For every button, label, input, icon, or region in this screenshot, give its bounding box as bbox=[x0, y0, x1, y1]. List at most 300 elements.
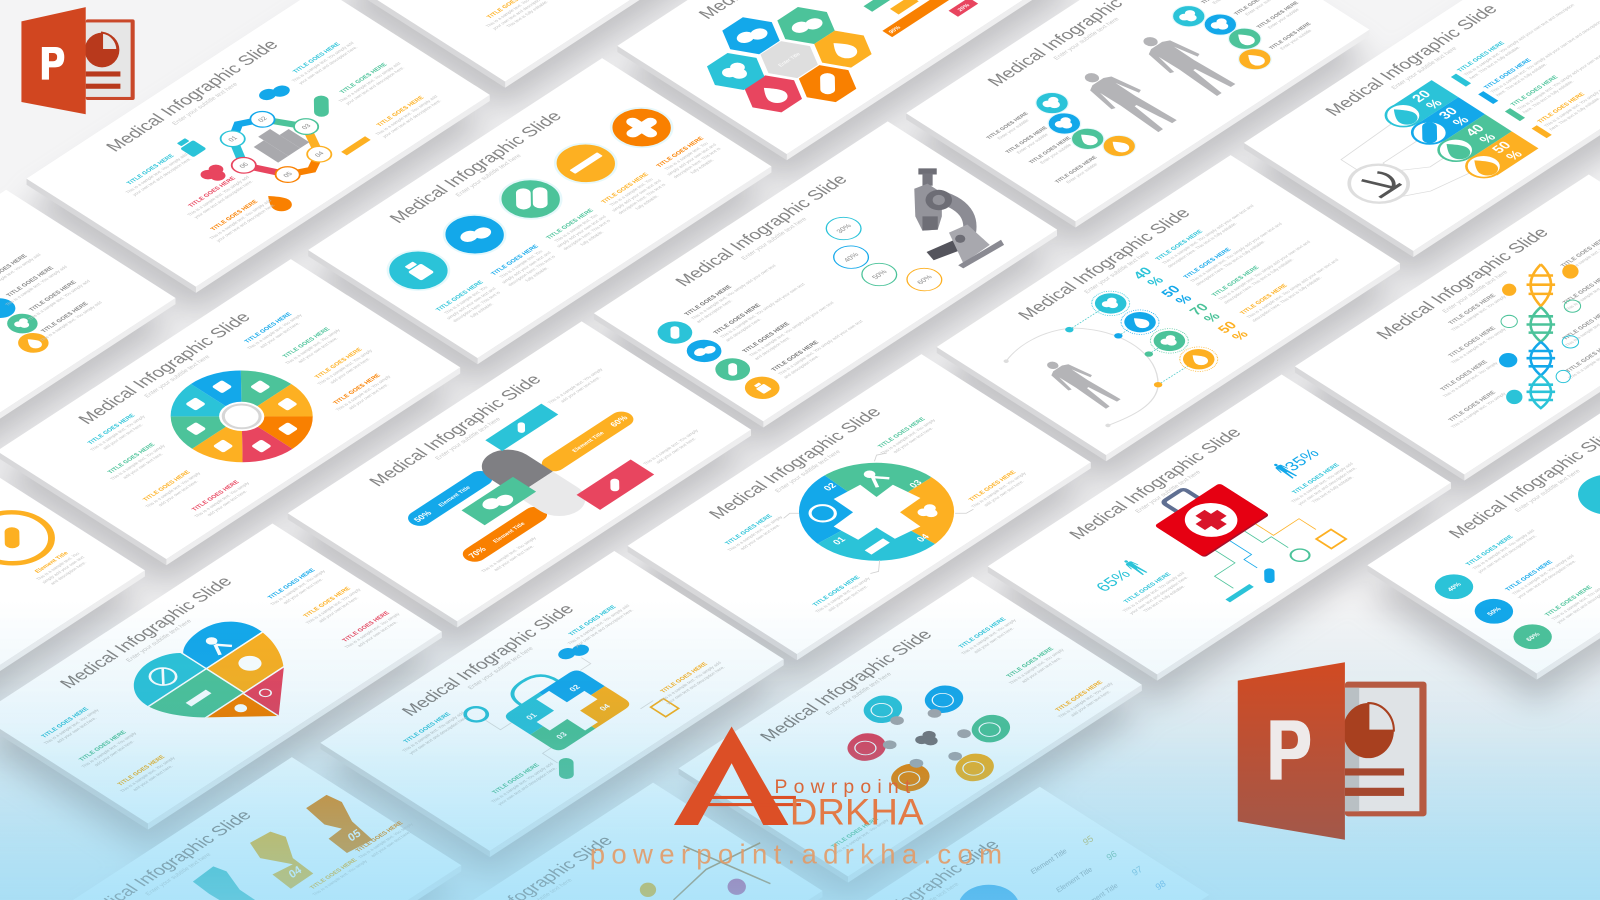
panel: timeline slide bbox=[359, 783, 822, 900]
text block: first aid items: This text is fully editable. bbox=[1142, 584, 1186, 613]
icon: hospital building bbox=[248, 123, 309, 163]
text block: arc items: TITLE GOES HERE bbox=[1155, 229, 1205, 262]
text block: cross items: add your own text here. bbox=[892, 426, 934, 454]
subtitle: Enter your subtitle text here bbox=[1390, 46, 1459, 91]
text block: wheel left items: add your own text here. bbox=[102, 423, 144, 450]
text block: heart left items: add your own text here. bbox=[131, 764, 174, 792]
chart: heart sections bbox=[134, 622, 284, 718]
text block: five columns: This is a sample text. You bbox=[553, 213, 599, 243]
subtitle: Enter your subtitle text here bbox=[1083, 250, 1152, 295]
text block: five columns: fully editable. bbox=[689, 158, 715, 175]
ring diagram: 03 bbox=[301, 123, 313, 131]
panel: cross circle slide bbox=[628, 354, 1091, 660]
text block: items: TITLE GOES HERE bbox=[1505, 560, 1554, 592]
human silhouettes bbox=[1072, 28, 1241, 137]
icon: center and gray organs bbox=[864, 699, 988, 779]
text block: cross items: This is a sample text. You simply bbox=[879, 418, 937, 455]
text block: body labels: TITLE GOES HERE bbox=[1005, 125, 1050, 155]
text block: five columns: fully editable. bbox=[524, 266, 550, 282]
text block: body notes bbox=[995, 0, 1323, 188]
human silhouette bbox=[1037, 355, 1125, 412]
logo: Adrkha Powerpoint: Powrpoint bbox=[774, 776, 911, 798]
text block: list items: This is a sample text. You simply add bbox=[4, 264, 69, 307]
text block: wheel right items: TITLE GOES HERE bbox=[314, 347, 364, 380]
text block: body labels: TITLE GOES HERE bbox=[1268, 21, 1313, 51]
bar labels: 60% bbox=[607, 413, 630, 428]
panel: capsule slide bbox=[288, 321, 751, 628]
text block: five columns: description here. This text is bbox=[617, 182, 667, 215]
subtitle: Enter your subtitle text here bbox=[774, 449, 843, 494]
text block: capsule right notes: This is a sample text. You simply bbox=[547, 367, 604, 405]
organ icons bbox=[1019, 0, 1289, 168]
subtitle: Enter your subtitle text here bbox=[1134, 469, 1203, 514]
text block: five columns: This is a sample text. You bbox=[608, 177, 654, 207]
text block: body labels: TITLE GOES HERE bbox=[985, 111, 1030, 141]
text block: right items: This is a sample text. You simply add bbox=[291, 41, 355, 83]
text block: band items bbox=[1457, 0, 1600, 131]
heading: Medical Infographic Slide bbox=[1321, 1, 1502, 119]
text block: list items: This is a sample text. You simply add your own text bbox=[719, 282, 806, 339]
text block: leaf items: add your own text here. bbox=[1020, 656, 1063, 684]
text block: arrow items: TITLE GOES HERE bbox=[355, 821, 405, 853]
text block: cross items: This is a sample text. You simply bbox=[970, 471, 1028, 509]
text block: first aid items: your own text and description here. bbox=[1128, 575, 1189, 615]
values list bbox=[1081, 833, 1168, 892]
circle row bbox=[375, 98, 685, 300]
text block: left items: This is a sample text. You simply add bbox=[125, 152, 189, 194]
text block: leaf items: TITLE GOES HERE bbox=[1006, 647, 1056, 679]
panel: medical bag slide bbox=[320, 551, 784, 857]
text block: list items bbox=[0, 246, 114, 342]
chart: folded arrows bbox=[193, 795, 372, 900]
text block: first aid items: This is a sample text. You simply add bbox=[1290, 461, 1355, 504]
percent values bbox=[1130, 265, 1253, 344]
percentage labels bbox=[816, 222, 935, 298]
text block: capsule right notes: add your own text here. bbox=[655, 437, 697, 464]
percent bands bbox=[1377, 80, 1538, 184]
bar labels bbox=[410, 397, 660, 560]
text block: right items bbox=[285, 32, 452, 140]
quadrant numbers: 04 bbox=[597, 702, 613, 712]
text block: items: your own text and description here. bbox=[1516, 559, 1577, 599]
text block: arc items: This is a sample text. You simply add your own text and bbox=[1189, 221, 1284, 283]
text block: cross items: add your own text here. bbox=[827, 585, 869, 612]
text block: capsule notes: This is a sample text. You simply bbox=[480, 536, 538, 573]
text block: wheel right items: TITLE GOES HERE bbox=[333, 373, 382, 406]
bag handle bbox=[504, 670, 558, 705]
text block: right items: TITLE GOES HERE bbox=[339, 62, 389, 95]
text block: items: your own text and description here. bbox=[1477, 534, 1538, 574]
heading: Medical Infographic Slide bbox=[1013, 205, 1195, 323]
text block: wheel left items: This is a sample text. You simply bbox=[193, 481, 251, 518]
subtitle: Enter your subtitle text here bbox=[467, 646, 536, 691]
percent values: % bbox=[1172, 292, 1195, 307]
element labels: Element Title bbox=[1029, 847, 1068, 876]
percent labels: 20 bbox=[1409, 88, 1434, 104]
text block: heart left items: This is a sample text. You simply bbox=[43, 708, 100, 745]
icon: large PowerPoint logo bbox=[1238, 662, 1427, 840]
values list: 97 bbox=[1130, 864, 1144, 878]
panel: left partial list slide bbox=[0, 190, 176, 496]
text block: leaf items: TITLE GOES HERE bbox=[831, 817, 880, 849]
text block: band items: here. This text is fully editable. bbox=[1548, 96, 1600, 131]
text block: list items: This is a sample text. You simply add bbox=[39, 300, 103, 342]
percent values: % bbox=[1144, 274, 1167, 289]
text block: body labels: TITLE GOES HERE bbox=[1256, 0, 1301, 30]
text block: right items: TITLE GOES HERE bbox=[292, 42, 342, 74]
text block: band items: This is a sample text. You simply add your own text and description bbox=[1463, 3, 1576, 77]
text block: wheel left items: This is a sample text. You simply bbox=[144, 471, 202, 508]
percent labels: % bbox=[1449, 114, 1472, 129]
text block: body notes: Enter your subtitle bbox=[1279, 28, 1313, 51]
logo: Adrkha Powerpoint bbox=[674, 727, 924, 832]
text block: capsule notes: add your own text here. bbox=[493, 544, 535, 572]
text block: five columns: TITLE GOES HERE bbox=[435, 280, 485, 313]
bar labels: Element Title bbox=[492, 522, 527, 544]
text block: right items: This is a sample text. You simply add bbox=[338, 61, 402, 103]
percent labels: 30 bbox=[1435, 105, 1461, 121]
text block: right items: your own text and description here. bbox=[344, 66, 406, 106]
text block: band items: TITLE GOES HERE bbox=[1537, 92, 1587, 124]
panel: slide top centre partial bbox=[336, 0, 799, 88]
text block: body notes: Enter your subtitle bbox=[1039, 142, 1073, 165]
panel: element list slide bbox=[746, 787, 1209, 900]
icon: person stat right bbox=[1271, 462, 1298, 479]
text block: wheel left items: TITLE GOES HERE bbox=[107, 443, 157, 475]
text block: heart right items: TITLE GOES HERE bbox=[303, 586, 352, 619]
capsule bbox=[471, 443, 596, 523]
text block: ring item: This is a sample text. You bbox=[35, 551, 81, 581]
text block: heart right items: This is a sample text. You simply bbox=[305, 587, 362, 625]
text block: five columns: TITLE GOES HERE bbox=[601, 172, 650, 205]
chart: folded arrows: 04 bbox=[287, 864, 305, 881]
text block: first aid items: This text is fully editable. bbox=[1310, 475, 1355, 504]
text block: right items: your own text and description here. bbox=[381, 99, 442, 139]
text block: band items: TITLE GOES HERE bbox=[1510, 75, 1560, 107]
text block: arrow items bbox=[299, 818, 420, 896]
percentage labels: 40% bbox=[842, 251, 861, 263]
text block: wheel right items: This is a sample text. You simply bbox=[316, 348, 374, 386]
text block: body labels: TITLE GOES HERE bbox=[1054, 155, 1099, 184]
text block: wheel right items: This is a sample text. You simply bbox=[335, 374, 392, 412]
text block: body notes: Enter your subtitle bbox=[996, 118, 1030, 140]
text block: heart left items: add your own text here. bbox=[93, 739, 135, 767]
text block: first aid items bbox=[1115, 457, 1365, 620]
tags bbox=[419, 403, 654, 555]
text block: five columns: TITLE GOES HERE bbox=[656, 136, 706, 169]
quadrant numbers: 01 bbox=[524, 711, 540, 721]
website url: powerpoint.adrkha.com bbox=[590, 838, 1002, 869]
text block: bag items: your own text and description here. bbox=[408, 715, 469, 755]
text block: capsule right notes: add your own text here. bbox=[559, 376, 602, 403]
text block: heart left items bbox=[37, 703, 182, 797]
text block: bag items bbox=[395, 598, 728, 814]
text block: body notes: Enter your subtitle bbox=[1065, 162, 1099, 184]
text block: bag items: This is a sample text. You simply add bbox=[490, 761, 555, 804]
text block: wheel left items: TITLE GOES HERE bbox=[142, 470, 192, 502]
bar labels: 70% bbox=[466, 545, 489, 560]
icon: person stats bbox=[1121, 558, 1149, 576]
icon: heart glyphs bbox=[144, 631, 293, 726]
text block: left items: your own text and description here. bbox=[131, 157, 192, 197]
percent labels: % bbox=[1476, 131, 1499, 146]
subtitle: Enter your subtitle text here bbox=[454, 153, 523, 198]
panel: left partial ring slide bbox=[0, 462, 145, 768]
icon: microscope bbox=[914, 168, 1004, 268]
subtitle: Enter your subtitle text here bbox=[143, 354, 212, 399]
text block: leaf items: This is a sample text. You simply bbox=[1008, 647, 1065, 685]
text block: arc items: This is a sample text. You simply add your own text and bbox=[1161, 203, 1255, 265]
text block: arc items: This is a sample text. You simply add your own text and bbox=[1217, 239, 1312, 301]
chart: eight segment wheel bbox=[141, 352, 342, 481]
percent labels: 40 bbox=[1462, 122, 1488, 138]
list icons bbox=[0, 294, 65, 357]
text block: ring item: Element Title bbox=[34, 551, 71, 574]
subtitle: Enter your subtitle text here bbox=[171, 81, 240, 126]
text block: capsule right notes bbox=[547, 367, 705, 469]
chart: zigzag line bbox=[673, 843, 770, 900]
percent values: 70 bbox=[1186, 301, 1212, 318]
text block: band items: here. This text is fully editable. bbox=[1521, 79, 1575, 114]
quadrant numbers: 03 bbox=[554, 731, 570, 741]
icon: timeline organs bbox=[640, 879, 746, 897]
quadrant numbers bbox=[784, 452, 970, 572]
text block: ring item bbox=[29, 547, 92, 588]
percent labels: 60% bbox=[1525, 632, 1542, 643]
icon: DNA side icons bbox=[1499, 264, 1581, 404]
percent labels: 40% bbox=[1446, 582, 1463, 593]
text block: wheel right items: add your own text here. bbox=[329, 357, 371, 384]
panel: body arc slide bbox=[937, 155, 1400, 461]
percent labels: 50 bbox=[1489, 139, 1515, 156]
text block: items bbox=[1465, 524, 1600, 624]
text block: cross items: This is a sample text. You simply bbox=[814, 576, 872, 614]
icon: first aid bag bbox=[1140, 474, 1270, 558]
progress bars: 20% bbox=[957, 3, 972, 13]
text block: wheel right items: TITLE GOES HERE bbox=[244, 312, 294, 344]
heading: Medical Infographic Slide bbox=[671, 171, 852, 289]
icon: circuit endpoints bbox=[1221, 527, 1346, 609]
subtitle: Enter your subtitle text here bbox=[825, 671, 894, 716]
stat: 35 percent: 35% bbox=[1281, 446, 1324, 474]
percent labels: 50% bbox=[1486, 606, 1503, 617]
subtitle: Enter your subtitle text here bbox=[1441, 269, 1510, 314]
text block: wheel right items: add your own text here. bbox=[258, 321, 301, 349]
text block: list items: and description here. bbox=[753, 336, 792, 361]
quadrant numbers bbox=[524, 683, 613, 741]
icons in quadrants bbox=[803, 467, 943, 557]
panel: percent bands slide bbox=[1244, 0, 1600, 257]
text block: wheel left items: This is a sample text. You simply bbox=[109, 443, 167, 481]
text block: items: This is a sample text. You simply add bbox=[1511, 553, 1575, 596]
percent labels bbox=[1409, 88, 1527, 164]
text block: body notes: Enter your subtitle bbox=[1266, 7, 1301, 30]
text block: leaf items: add your own text here. bbox=[1069, 690, 1112, 717]
text block: five columns: fully editable. bbox=[634, 194, 660, 210]
text block: body notes: Enter your subtitle bbox=[1015, 132, 1050, 155]
text block: five columns: description here. This text is bbox=[452, 290, 502, 323]
subtitle: Enter your subtitle text here bbox=[1052, 16, 1121, 61]
text block: wheel right items: add your own text here. bbox=[347, 383, 390, 410]
text block: left items: This is a sample text. You simply bbox=[1442, 361, 1499, 398]
icon: small PowerPoint logo bbox=[21, 7, 135, 114]
percentage labels: 30% bbox=[835, 222, 854, 235]
text block: heart left items: TITLE GOES HERE bbox=[78, 730, 128, 763]
heading: Medical Infographic Slide bbox=[74, 309, 255, 427]
text block: cross items: TITLE GOES HERE bbox=[968, 470, 1018, 503]
text block: list items: TITLE GOES HERE bbox=[29, 280, 78, 313]
bottom blue haze bbox=[0, 602, 1600, 900]
bars bbox=[402, 392, 668, 565]
percentage labels: 50% bbox=[870, 268, 890, 281]
text block: left items: TITLE GOES HERE bbox=[126, 154, 176, 186]
text block: left items: TITLE GOES HERE bbox=[1448, 390, 1498, 423]
yellow ring bbox=[0, 502, 68, 574]
text block: five columns: simply add your own text and bbox=[556, 214, 608, 248]
ring diagram bbox=[201, 98, 351, 195]
panel: six leaves slide bbox=[679, 577, 1142, 883]
text block: left items: TITLE GOES HERE bbox=[1448, 293, 1498, 326]
text block: five columns: simply add your own text and bbox=[445, 286, 497, 320]
text block: left items: This is a sample text. You simply add bbox=[208, 198, 273, 240]
text block: five columns: simply add your own text and bbox=[611, 178, 663, 212]
text block: wheel left items: add your own text here. bbox=[122, 452, 164, 480]
text block: bag items: TITLE GOES HERE bbox=[492, 763, 541, 795]
text block: band items: This is a sample text. You simply add your own text and description bbox=[1489, 20, 1600, 94]
icon: organ glyphs bbox=[1031, 1, 1279, 162]
percent values: 50 bbox=[1215, 319, 1240, 336]
panel: five circles slide bbox=[308, 58, 771, 364]
bottom blue multiply gradient bbox=[0, 602, 1600, 900]
text block: leaf items bbox=[736, 613, 1122, 864]
text block: cross items: TITLE GOES HERE bbox=[812, 575, 862, 608]
logo: Adrkha Powerpoint: DRKHA bbox=[790, 791, 924, 832]
bar labels: 50% bbox=[411, 509, 434, 524]
percent circles bbox=[1425, 466, 1600, 654]
text block: leaf items: TITLE GOES HERE bbox=[1055, 680, 1104, 713]
subtitle: Enter your subtitle text here bbox=[144, 852, 213, 897]
percent values: % bbox=[1229, 328, 1251, 343]
text block: right items: TITLE GOES HERE bbox=[376, 96, 426, 128]
text block: leaf items: This is a sample text. You simply bbox=[832, 818, 890, 855]
text block: bag items: your own text and description here. bbox=[665, 665, 726, 705]
panel: hospital ring slide bbox=[27, 0, 490, 293]
text block: heart right items: add your own text here. bbox=[282, 577, 324, 605]
panel: heart slide bbox=[0, 523, 442, 830]
heading: Medical Infographic Slide bbox=[1064, 424, 1246, 542]
icon list bbox=[650, 316, 787, 404]
text block: five columns: simply add your own text and bbox=[666, 142, 718, 176]
text block: wheel left items bbox=[66, 410, 256, 532]
text block: heart right items bbox=[263, 562, 407, 655]
text block: body labels bbox=[984, 0, 1323, 188]
quadrant numbers: 04 bbox=[914, 532, 932, 543]
progress bars bbox=[854, 0, 1007, 48]
text block: heart left items: This is a sample text. You simply bbox=[80, 731, 138, 768]
text block: left items: TITLE GOES HERE bbox=[1448, 326, 1497, 358]
text block: list items: and description here. bbox=[782, 354, 820, 379]
panel: DNA slide bbox=[1295, 174, 1600, 481]
text block: heart left items: This is a sample text. You simply bbox=[119, 755, 177, 793]
text block: left items: This is a sample text. You simply bbox=[1450, 391, 1508, 429]
percent values: 50 bbox=[1158, 283, 1184, 299]
text block: left items: This is a sample text. You simply bbox=[1450, 327, 1507, 364]
chart: folded arrows: 05 bbox=[346, 827, 363, 844]
element labels: Element Title bbox=[1055, 865, 1094, 895]
text block: band items: here. This text is fully editable. bbox=[1468, 45, 1521, 80]
panel: microscope slide bbox=[594, 121, 1057, 428]
quadrant numbers: 01 bbox=[831, 535, 848, 546]
text block: arrow items: This is a sample text. You simply bbox=[357, 822, 415, 859]
heading: Medical Infographic Slide bbox=[55, 573, 236, 691]
text block: heart right items: This is a sample text. You simply bbox=[269, 569, 327, 606]
text block: wheel left items: add your own text here. bbox=[157, 479, 199, 507]
panel: three circles slide bbox=[1367, 373, 1600, 680]
text block: band items: here. This text is fully editable. bbox=[1495, 62, 1548, 97]
quadrant numbers: 02 bbox=[821, 481, 838, 492]
subtitle: Enter your subtitle text here bbox=[125, 618, 194, 663]
text block: list items: and description here. bbox=[724, 317, 763, 342]
text block: list items: This is a sample text. You simply add your own text bbox=[690, 263, 777, 320]
text block: ring item: simply add your own text bbox=[41, 555, 86, 584]
heading: Medical Infographic Slide bbox=[364, 371, 546, 489]
text block: arrow items: This is a sample text. You simply bbox=[311, 859, 369, 896]
text block: arrow items: TITLE GOES HERE bbox=[309, 858, 359, 890]
text block: left items: your own text and description here. bbox=[215, 203, 276, 243]
text block: left items: This is a sample text. You simply add bbox=[186, 175, 251, 217]
text block: capsule right notes: This is a sample text. You simply bbox=[642, 428, 700, 466]
chart: DNA helix bbox=[1527, 264, 1555, 408]
text block: first aid items: TITLE GOES HERE bbox=[1292, 463, 1341, 495]
icon: gray microscope ring bbox=[1337, 157, 1420, 211]
values list: 96 bbox=[1105, 849, 1119, 863]
text block: leaf items: This is a sample text. You simply bbox=[1057, 681, 1114, 719]
text block: arc items bbox=[1155, 200, 1345, 323]
text block: list items: and description here. bbox=[695, 299, 734, 324]
text block: items: TITLE GOES HERE bbox=[1544, 585, 1594, 618]
text block: heart right items: TITLE GOES HERE bbox=[267, 568, 317, 600]
panel: arrows slide bbox=[0, 757, 461, 900]
text block: arc items: description here. This text is fully editable. bbox=[1166, 221, 1238, 268]
text block: cross items bbox=[716, 410, 1035, 617]
text block: first aid items: TITLE GOES HERE bbox=[1123, 572, 1173, 604]
text block: partial title bbox=[479, 0, 560, 35]
percent values: % bbox=[1200, 310, 1223, 325]
text block: ring item: and description here. bbox=[49, 561, 88, 586]
text block: right items bbox=[1477, 233, 1600, 380]
quadrant numbers: 02 bbox=[567, 683, 583, 693]
text block: heart left items: TITLE GOES HERE bbox=[117, 755, 167, 787]
text block: leaf items: add your own text here. bbox=[973, 626, 1015, 654]
text block: list items: TITLE GOES HERE bbox=[6, 266, 55, 298]
leaf badges bbox=[815, 666, 1041, 812]
ring diagram: 05 bbox=[282, 171, 295, 179]
text block: list items: TITLE GOES HERE bbox=[40, 302, 90, 334]
node connectors bbox=[1002, 297, 1206, 428]
icon: circle glyphs bbox=[398, 108, 670, 286]
text block: heart right items: add your own text here. bbox=[356, 620, 399, 648]
text block: cross items: TITLE GOES HERE bbox=[877, 417, 927, 449]
progress bars: 90% bbox=[888, 25, 903, 35]
text block: items: This is a sample text. You simply add bbox=[1471, 528, 1536, 570]
percentage labels: 60% bbox=[915, 273, 935, 286]
text block: left items bbox=[1369, 290, 1583, 429]
text block: arc items: TITLE GOES HERE bbox=[1183, 247, 1233, 280]
text block: five columns: fully editable. bbox=[579, 230, 605, 246]
text block: leaf items: TITLE GOES HERE bbox=[958, 617, 1008, 649]
values list: 95 bbox=[1081, 833, 1095, 847]
text block: left items: TITLE GOES HERE bbox=[210, 200, 260, 232]
